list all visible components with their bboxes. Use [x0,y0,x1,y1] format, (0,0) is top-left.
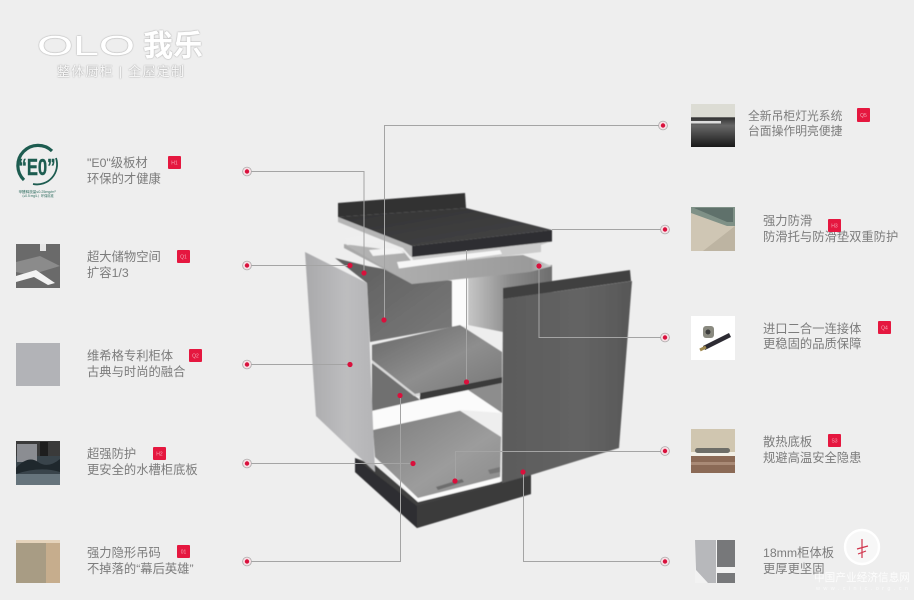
thumbnail: shelf [16,244,60,288]
hotspot dots on cabinet [347,263,542,484]
thumbnail: board section [695,540,735,583]
feature: heat dissipating base: 规避高温安全隐患 [763,450,861,465]
feature: 18mm board: 更厚更坚固 [763,562,824,576]
watermark seal [845,530,879,564]
badge [878,321,891,334]
cabinet floor [373,411,501,502]
cabinet illustration [305,193,632,528]
feature text: 散热底板 [763,434,812,449]
icon: E0 badge: 甲醛释放量≤0.25mg/m³ [18,189,56,194]
badge: S3 [831,438,838,444]
target markers [243,121,669,566]
side panel left [305,252,375,472]
badge: Q1 [180,254,187,260]
thumbnail: hanger [16,540,60,583]
feature text: 维希格专利柜体 [87,348,173,363]
badge: H2 [156,452,163,458]
logo tagline: 整体厨柜 | 全屋定制 [57,64,184,79]
feature: patented cabinet body [16,343,202,386]
door [502,270,632,483]
badge: Q5 [860,113,867,119]
feature: storage space: 扩容1/3 [87,265,129,280]
badge [828,219,841,232]
side panel right [468,265,552,332]
thumbnail: connector [691,316,735,360]
feature: wall cabinet lighting: 台面操作明亮便捷 [748,124,843,138]
plinth [355,458,531,528]
badge [828,434,841,447]
logo [37,30,203,79]
feature: connector [691,316,891,360]
feature text: 超大储物空间 [87,249,161,264]
badge [168,156,181,169]
watermark text: 中国产业经济信息网 [814,571,910,584]
shelf [372,325,502,400]
thumbnail: base board [691,429,735,473]
watermark url: www.cinic.org.cn [815,586,908,592]
thumbnail: grey texture [16,343,60,386]
thumbnail: lighting [691,104,735,147]
feature: hidden hanger: 不掉落的“幕后英雄” [87,561,194,576]
feature: sink base protection [16,441,198,485]
feature: wall cabinet lighting [691,104,870,147]
feature text: 超强防护 [87,446,136,461]
feature: anti-slip: 防滑托与防滑垫双重防护 [763,229,898,244]
leader lines [247,126,665,562]
logo mark: 我乐: 我乐 [143,30,203,63]
icon: E0 badge: “E0” [18,154,56,180]
feature: sink base protection: 更安全的水槽柜底板 [87,462,198,477]
opening behind the shelves [452,277,468,326]
feature: 18mm board [695,540,834,583]
feature: storage space [16,244,190,288]
feature: E0 board: 环保的才健康 [87,171,161,186]
feature text: 全新吊柜灯光系统 [748,109,843,123]
icon: E0 badge: （≤0.5 mg/L）环保标准 [20,193,54,198]
anti-slip strips [345,235,552,268]
feature: heat dissipating base [691,429,861,473]
feature: hidden hanger [16,540,194,583]
feature: anti-slip [691,207,898,251]
feature text: 强力隐形吊码 [87,546,161,560]
badge: Q2 [192,354,199,360]
feature text: 进口二合一连接体 [763,321,861,336]
badge [177,545,190,558]
badge: H1 [171,160,178,166]
white gap below shelf [372,390,502,430]
badge: H3 [831,224,838,230]
badge: Q4 [881,326,888,332]
logo mark: OLO: OLO [37,30,135,61]
lower rear panels [372,363,502,413]
badge [857,108,870,122]
icon: E0 badge [18,145,57,198]
thumbnail: anti-slip tray [691,207,735,251]
thumbnail: sink cabinet [16,441,60,485]
feature text: "E0"级板材 [87,156,148,170]
back panel left [335,258,452,342]
feature text: 强力防滑 [763,213,812,228]
feature: connector: 更稳固的品质保障 [763,336,861,351]
badge: 01 [181,550,186,556]
badge [153,447,166,460]
feature: patented cabinet body: 古典与时尚的融合 [87,364,185,379]
badge [189,349,202,362]
support plate [344,244,552,284]
countertop [338,193,552,257]
badge [177,250,190,263]
watermark [814,530,910,592]
feature: E0 board [18,145,181,198]
feature text: 18mm柜体板 [763,546,834,560]
